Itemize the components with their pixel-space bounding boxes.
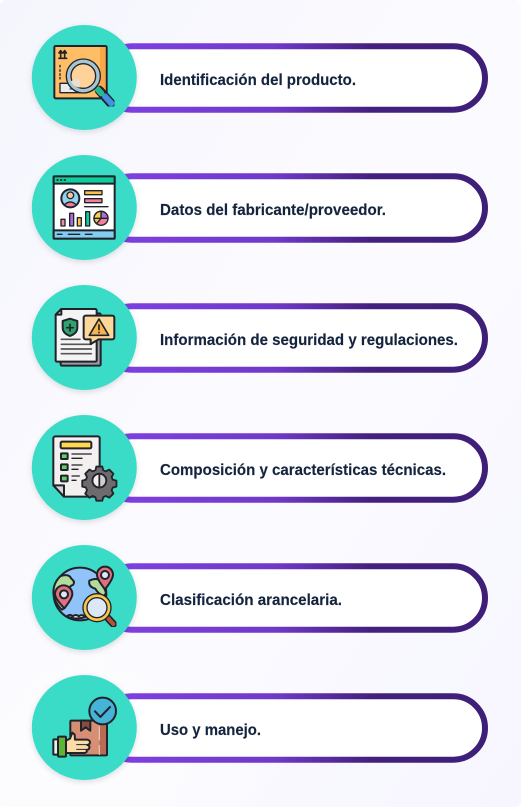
label: Clasificación arancelaria. [160, 592, 342, 609]
teal circle [32, 285, 137, 390]
icon: hand holding box with check [53, 698, 116, 757]
row 5: tariff classification [32, 545, 485, 650]
row 2: manufacturer data [32, 155, 485, 260]
pill: manufacturer data [100, 176, 485, 240]
label: Uso y manejo. [160, 722, 261, 739]
label: Información de seguridad y regulaciones. [160, 332, 458, 349]
icon: checklist with gear [53, 436, 116, 501]
pill: tariff classification [100, 566, 485, 630]
row 6: use and handling [32, 675, 485, 780]
teal circle [32, 155, 137, 260]
row 4: composition [32, 415, 485, 520]
label: Identificación del producto. [160, 72, 356, 89]
row 3: safety information [32, 285, 485, 390]
teal circle [32, 25, 137, 130]
icon: document with warning [56, 309, 114, 366]
teal circle [32, 675, 137, 780]
pill: product identification [100, 46, 485, 110]
label: Datos del fabricante/proveedor. [160, 202, 386, 219]
label: Composición y características técnicas. [160, 462, 446, 479]
row 1: product identification [32, 25, 485, 130]
teal circle [32, 545, 137, 650]
pill: composition [100, 436, 485, 500]
icon: dashboard window [54, 176, 115, 239]
icon: box with magnifier [54, 46, 111, 103]
icon: globe with pins and magnifier [53, 567, 113, 624]
teal circle [32, 415, 137, 520]
pill: use and handling [100, 696, 485, 760]
pill: safety information [100, 306, 485, 370]
